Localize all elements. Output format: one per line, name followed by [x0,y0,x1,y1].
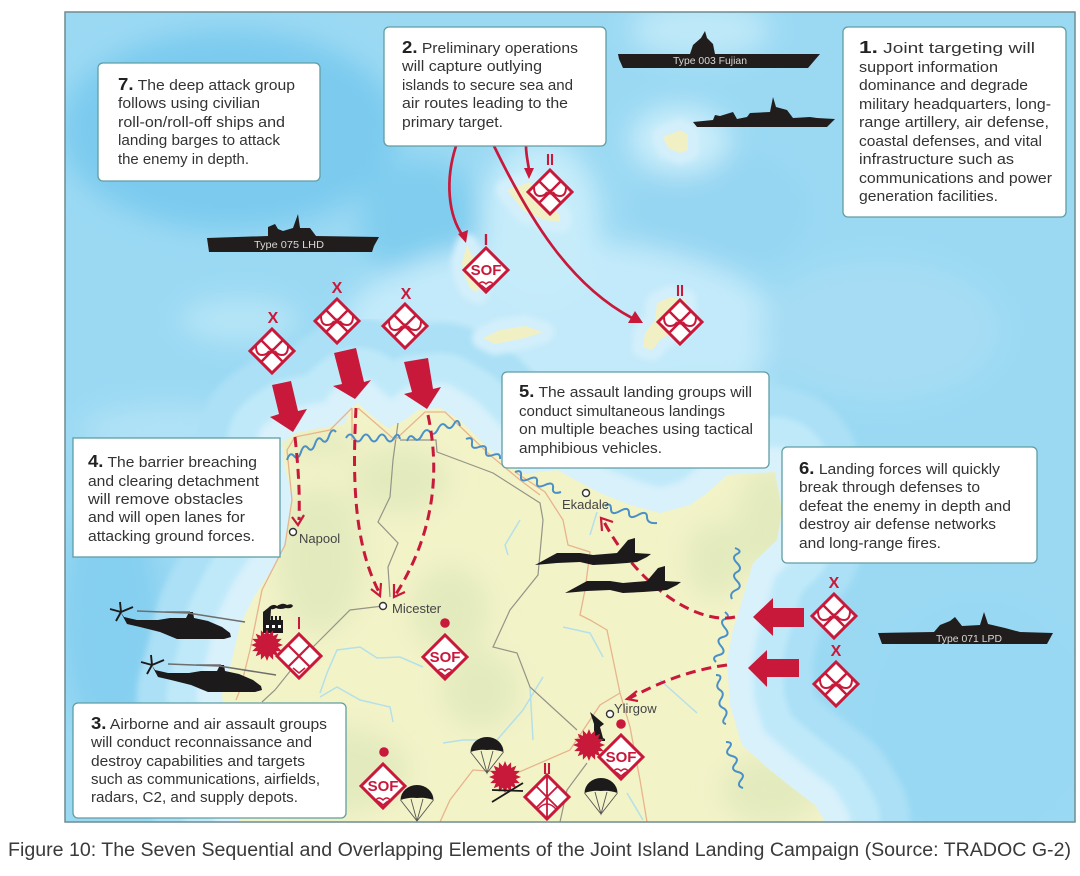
callout 2: 2. Preliminary operations [402,37,578,57]
roads, borders and rivers [236,408,697,822]
mainland [222,403,825,825]
icon: explosion Ylirgow [573,729,605,761]
callout 3 [73,703,346,818]
SOF company, island [464,232,508,292]
icon: jets [535,538,681,593]
amphibious brigade, north centre: X [332,280,343,297]
callout 1: support information [859,60,998,76]
amphibious brigade, east upper [812,575,856,638]
callout 3: 3. Airborne and air assault groups [91,713,327,733]
SOF near Ylirgow [599,719,643,779]
unit symbols [250,152,858,819]
icon: type 003 Fujian carrier: Type 003 Fujian [673,55,747,67]
SOF south-west [361,747,405,808]
amphibious brigades, north: X [268,310,279,327]
red dashed manoeuvre arrows [292,408,735,701]
airborne battalion [525,761,569,819]
cities: Micester [392,601,442,616]
deep water shading [66,12,989,707]
amphibious brigade, north right [383,286,427,348]
callout 6 [782,447,1037,563]
callout 1: military headquarters, long- [859,97,1051,113]
callout 4: attacking ground forces. [88,529,255,545]
callout 1: dominance and degrade [859,78,1028,94]
cities: Ylirgow [614,701,657,716]
callout 2: primary target. [402,115,503,131]
callout 7: landing barges to attack [118,133,281,149]
cities: Napool [299,531,340,546]
amphibious brigade, east lower [814,643,858,706]
icon: explosion airfield [489,761,524,803]
callout 7: the enemy in depth. [118,152,249,168]
SOF company, island: I [484,232,488,249]
figure caption: Figure 10: The Seven Sequential and Overlapping Elements of the Joint Island Landing Campaign (Source: TRADOC G-2) [8,840,1071,861]
amphibious battalion, right island: II [676,283,684,300]
callout 4 [73,438,280,557]
callout 3: destroy capabilities and targets [91,754,305,770]
callout 4: will remove obstacles [87,492,243,508]
amphibious brigades, north [250,310,294,373]
callout 2 [384,27,606,146]
callout 5: on multiple beaches using tactical [519,422,753,438]
amphibious battalion, upper island [528,152,572,214]
amphibious battalion, right island [658,283,702,344]
reconnaissance company [277,617,321,678]
callout 2: will capture outlying [401,59,542,75]
icon: type 071 LPD: Type 071 LPD [936,633,1002,645]
amphibious brigade, north centre [315,280,359,343]
SOF near Ylirgow: SOF [606,749,636,766]
callout 1: 1. Joint targeting will [859,37,1035,57]
icon: destroyer [693,97,835,127]
callout 5: conduct simultaneous landings [519,404,725,420]
large red landing arrows [270,348,804,687]
icon: parachute centre [470,737,504,773]
amphibious brigade, north right: X [401,286,412,303]
icon: parachute west [400,785,434,821]
callout 5: 5. The assault landing groups will [519,381,752,401]
callout 2: islands to secure sea and [402,78,573,94]
cities: Ekadale [562,497,609,512]
icon: factory target [263,604,293,633]
shallow water around coast [222,403,825,822]
callout 1: generation facilities. [859,189,998,205]
callout 2: air routes leading to the [402,96,568,112]
callout 5: amphibious vehicles. [519,441,662,457]
icon: radar [590,712,605,741]
icon: type 075 LHD: Type 075 LHD [254,239,324,251]
callout 7: roll-on/roll-off ships and [118,115,285,131]
icon: explosion west [251,629,283,661]
icon: type 071 LPD [878,612,1053,645]
callout 1: infrastructure such as [859,152,1014,168]
callout 1: communications and power [859,171,1052,187]
callout 1: coastal defenses, and vital [859,134,1042,150]
airborne battalion: II [543,761,551,778]
amphibious brigade, east lower: X [831,643,842,660]
callout 7: follows using civilian [118,96,260,112]
red solid arrows from callout 2 [449,146,643,323]
icon: parachute east [584,778,618,814]
icon: type 075 LHD [207,214,379,252]
SOF near Micester: SOF [430,649,460,666]
callout 7: 7. The deep attack group [118,74,295,94]
SOF company, island: SOF [471,262,501,279]
callout 5 [502,372,769,468]
callout 6: and long-range fires. [799,536,941,552]
amphibious brigade, east upper: X [829,575,840,592]
icon: helicopter upper [110,602,245,639]
callout 6: destroy air defense networks [799,517,996,533]
callout 6: 6. Landing forces will quickly [799,458,1001,478]
icon: helicopter lower [141,655,276,692]
callout 7 [98,63,320,181]
callout 1: range artillery, air defense, [859,115,1049,131]
callout 1 [843,27,1066,217]
callout 4: and will open lanes for [88,510,245,526]
assault wave lines [287,421,743,788]
callout 4: 4. The barrier breaching [88,451,257,471]
icon: type 003 Fujian carrier [618,31,820,68]
SOF south-west: SOF [368,778,398,795]
callout 6: defeat the enemy in depth and [799,499,1011,515]
amphibious battalion, upper island: II [546,152,554,169]
islands [462,130,688,350]
callout 3: radars, C2, and supply depots. [91,790,298,806]
callout 3: such as communications, airfields, [91,772,320,788]
SOF near Micester [423,618,467,679]
cities [290,490,657,718]
callout 4: and clearing detachment [88,474,259,490]
callout 6: break through defenses to [799,480,980,496]
callout 3: will conduct reconnaissance and [90,735,312,751]
